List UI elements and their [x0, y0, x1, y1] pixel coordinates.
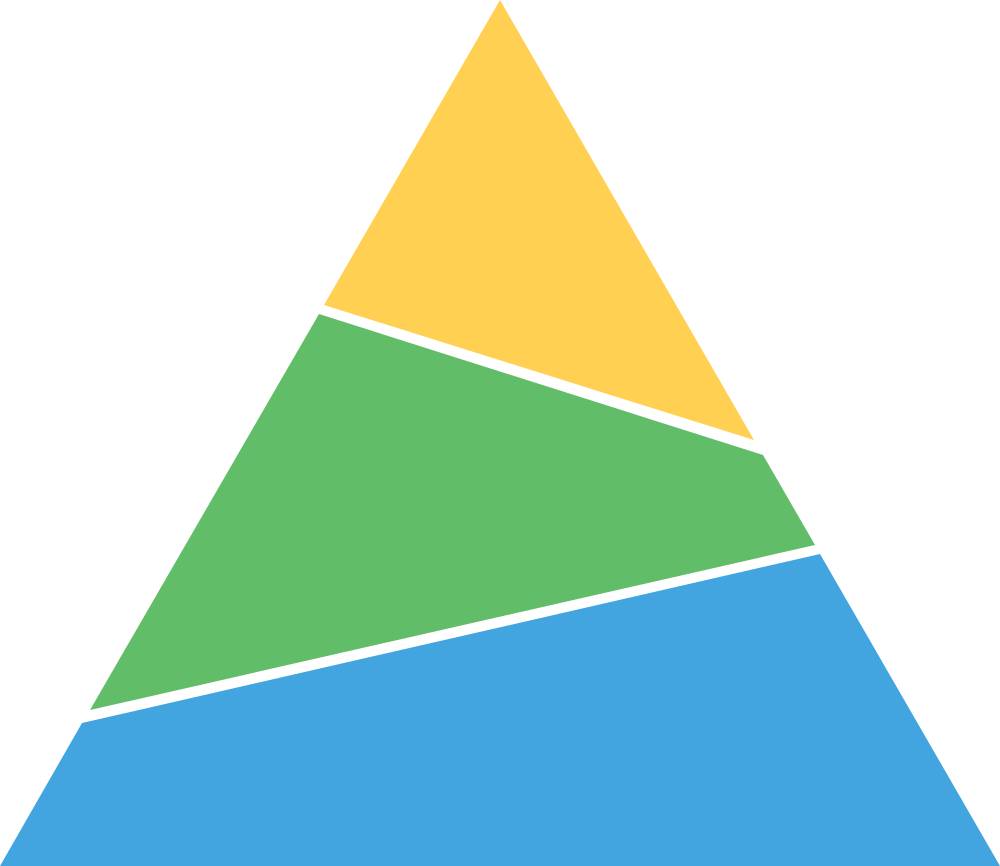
- segment: top yellow: [324, 0, 754, 440]
- segment: middle green: [90, 314, 815, 710]
- segment: bottom blue: [0, 554, 1000, 866]
